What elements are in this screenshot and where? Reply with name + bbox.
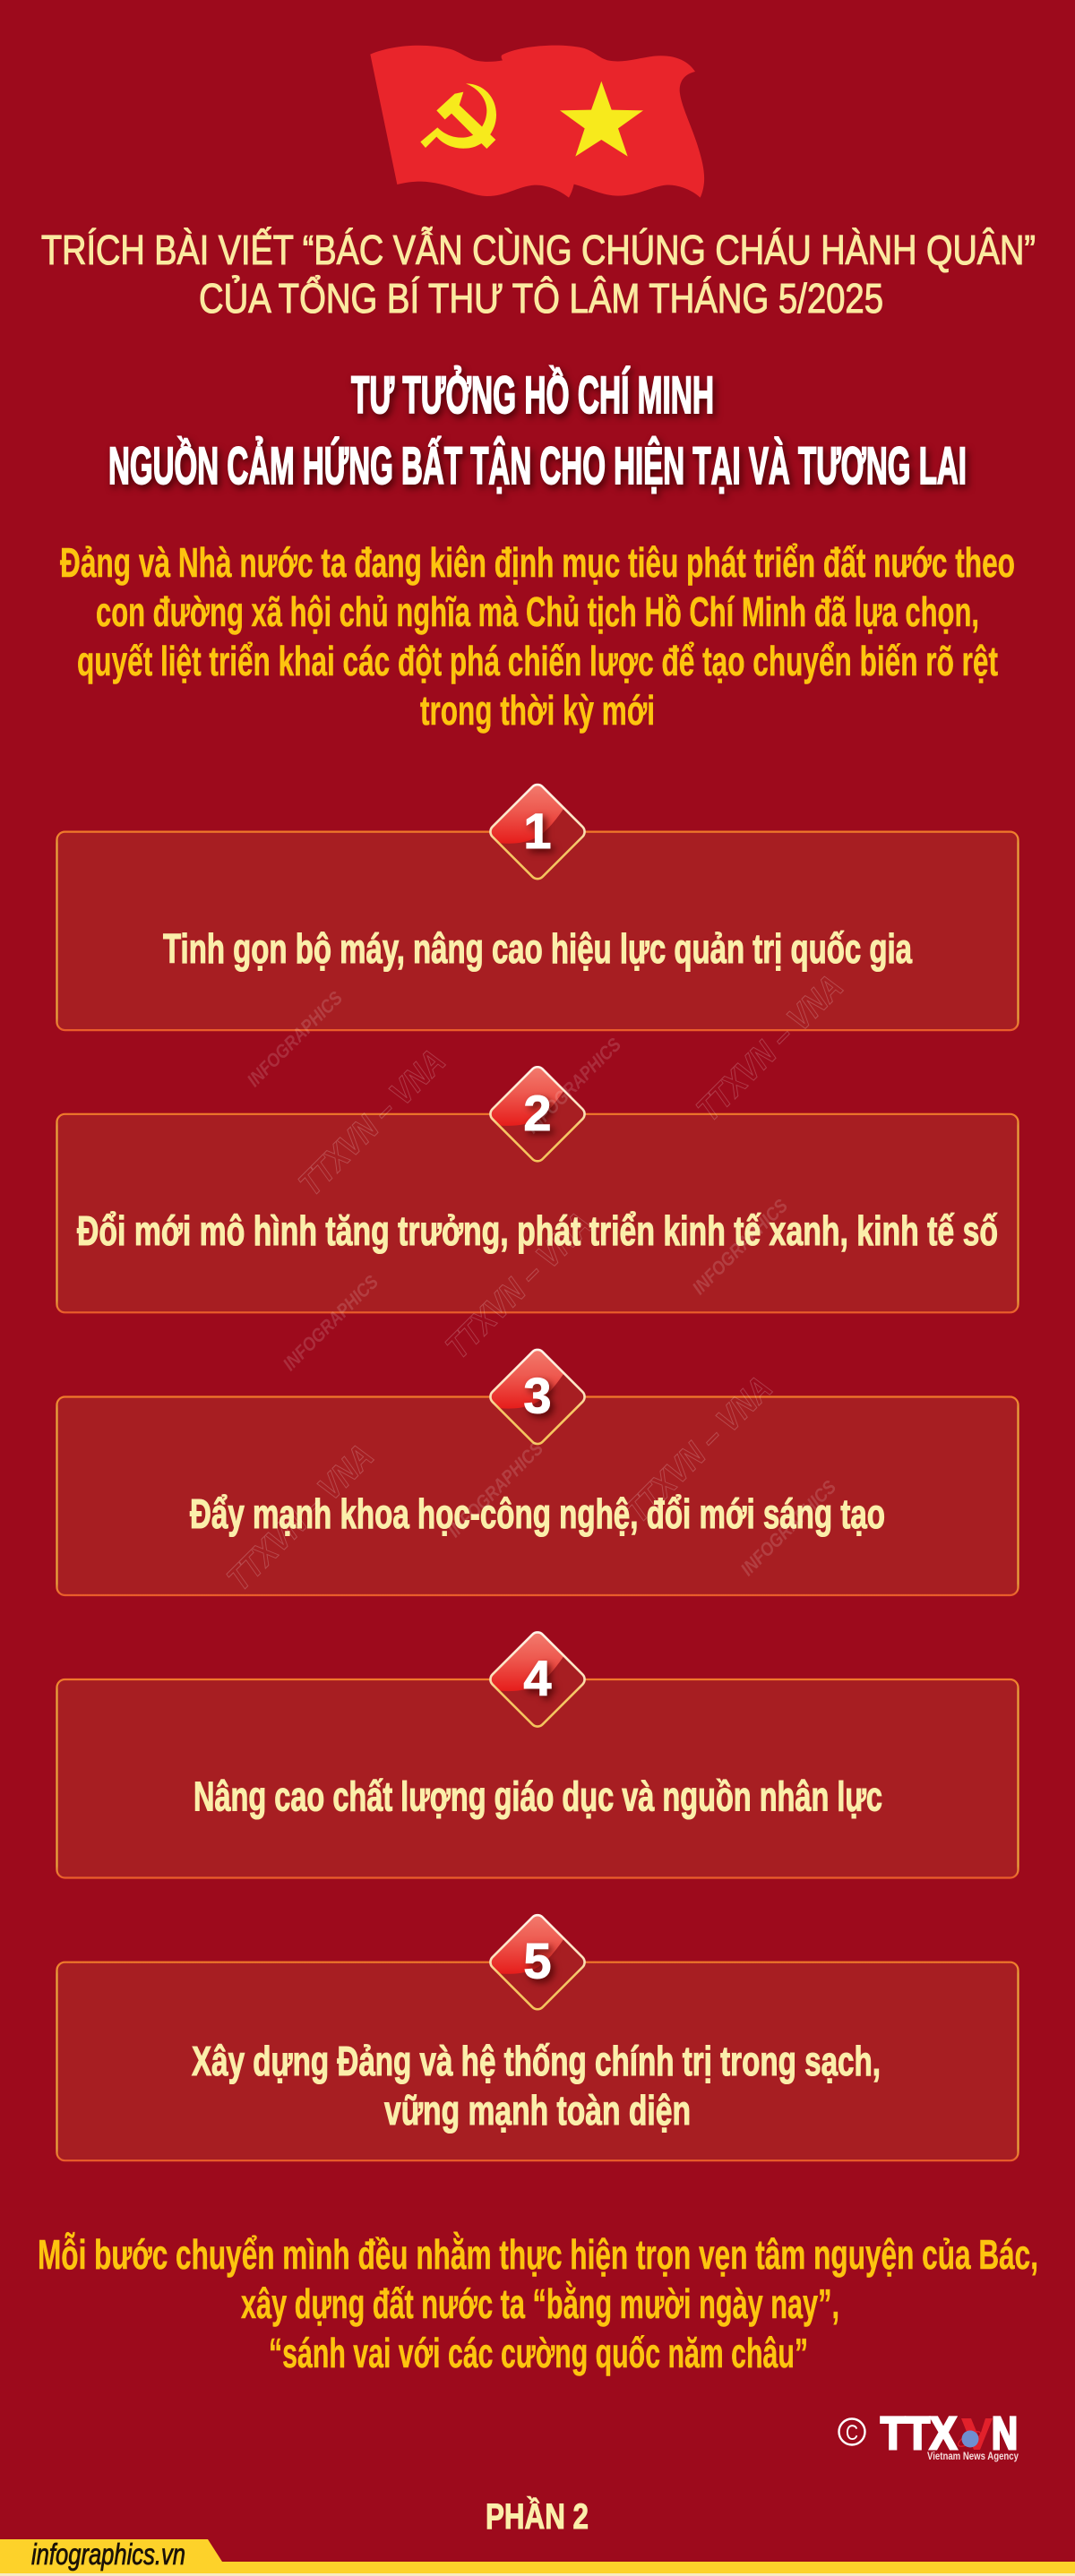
- watermarks: TTXVN – VNA: [619, 1370, 780, 1531]
- watermarks: INFOGRAPHICS: [522, 1035, 625, 1138]
- closing paragraph: [38, 2231, 1038, 2376]
- intro paragraph: trong thời kỳ mới: [420, 687, 655, 734]
- copyright mark: [838, 2418, 865, 2445]
- watermarks: [220, 968, 851, 1599]
- source line 2: CỦA TỔNG BÍ THƯ TÔ LÂM THÁNG 5/2025: [199, 275, 883, 322]
- badge 3: 3: [523, 1367, 552, 1424]
- agency wordmark: N: [992, 2408, 1018, 2459]
- badge 2: 2: [523, 1085, 552, 1141]
- watermarks: INFOGRAPHICS: [444, 1438, 547, 1541]
- copyright mark: C: [846, 2421, 858, 2445]
- panel: step 4: [57, 1617, 1018, 1877]
- watermarks: TTXVN – VNA: [690, 968, 851, 1129]
- badge 5: 5: [523, 1933, 552, 1989]
- source line: [41, 227, 1036, 322]
- watermarks: TTXVN – VNA: [292, 1043, 453, 1204]
- panel: step 1: [57, 769, 1018, 1030]
- watermarks: TTXVN – VNA: [439, 1206, 600, 1367]
- closing paragraph: “sánh vai với các cường quốc năm châu”: [269, 2330, 808, 2376]
- title: [108, 366, 967, 495]
- box 5: [57, 1962, 1018, 2160]
- watermarks: INFOGRAPHICS: [737, 1477, 840, 1580]
- site name: infographics.vn: [31, 2537, 185, 2571]
- badge 5: [475, 1900, 588, 2013]
- box 2: [57, 1114, 1018, 1312]
- box 1: [57, 832, 1018, 1030]
- icon: party and national flag: [370, 46, 704, 198]
- badge 4: [475, 1617, 588, 1730]
- hammer and sickle: [420, 83, 496, 149]
- step 5 text: vững mạnh toàn diện: [384, 2087, 691, 2134]
- agency wordmark: [881, 2408, 1018, 2459]
- logo: TTXVN copyright: [838, 2408, 1019, 2462]
- watermarks: INFOGRAPHICS: [244, 988, 347, 1091]
- watermarks: INFOGRAPHICS: [689, 1196, 792, 1299]
- panel: step 3: [57, 1335, 1018, 1595]
- yellow band with tab: [0, 2539, 1075, 2573]
- badge 1: [475, 769, 588, 881]
- badge 1: 1: [523, 803, 552, 859]
- watermarks: INFOGRAPHICS: [280, 1272, 383, 1375]
- panel: step 5: [57, 1900, 1018, 2160]
- box 3: [57, 1397, 1018, 1595]
- agency tagline: Vietnam News Agency: [927, 2450, 1019, 2462]
- title line 1: TƯ TƯỞNG HỒ CHÍ MINH: [351, 366, 714, 425]
- flag cloth: [370, 46, 704, 198]
- badge 3: [475, 1335, 588, 1447]
- box 4: [57, 1679, 1018, 1877]
- footer band: [0, 2537, 1075, 2576]
- panel: step 2: [57, 1052, 1018, 1312]
- watermarks: TTXVN – VNA: [220, 1438, 382, 1599]
- star: [560, 82, 643, 157]
- part label: PHẦN 2: [486, 2495, 589, 2537]
- agency wordmark: TTX: [881, 2408, 957, 2459]
- badge 4: 4: [523, 1650, 552, 1706]
- step 5 text: [192, 2038, 881, 2134]
- intro paragraph: [60, 539, 1015, 734]
- badge 2: [475, 1052, 588, 1164]
